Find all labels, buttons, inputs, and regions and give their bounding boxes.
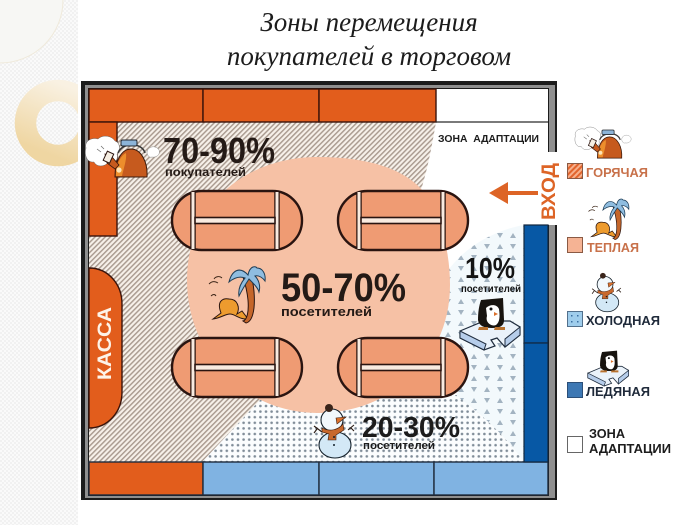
hot zone statistic: покупателей — [165, 167, 246, 179]
cold zone dots — [202, 395, 524, 462]
display table bottom left — [172, 338, 302, 397]
legend: adaptation zone — [568, 426, 671, 456]
outer walls — [81, 81, 557, 500]
legend — [568, 127, 671, 456]
decorative left strip — [0, 0, 78, 525]
icon: penguin on ice — [460, 298, 520, 350]
legend: hot zone — [568, 164, 648, 180]
legend: hot zone: ГОРЯЧАЯ — [586, 165, 648, 180]
warm zone statistic: посетителей — [281, 304, 372, 319]
cash desk: КАССА — [94, 307, 116, 380]
icy zone statistic — [461, 253, 521, 295]
warm zone — [187, 157, 450, 413]
title: Зоны перемещения — [260, 7, 478, 37]
icon: kettle — [85, 136, 159, 177]
legend: warm zone: ТЕПЛАЯ — [587, 240, 639, 255]
right icy shelves — [524, 225, 548, 462]
legend icon: kettle — [575, 127, 631, 158]
legend: warm zone — [568, 238, 639, 255]
icon: snowman — [314, 404, 354, 458]
legend icon: snowman — [592, 273, 621, 312]
left hot shelf — [89, 122, 117, 236]
warm zone statistic: 50-70% — [281, 266, 406, 310]
legend: adaptation zone: АДАПТАЦИИ — [589, 441, 671, 456]
hot zone statistic: 70-90% — [163, 130, 275, 171]
legend: cold zone: ХОЛОДНАЯ — [586, 313, 660, 328]
entrance arrow — [489, 182, 538, 204]
icy zone statistic: посетителей — [461, 284, 521, 295]
cold zone statistic: 20-30% — [362, 412, 460, 444]
legend: icy zone: ЛЕДЯНАЯ — [586, 384, 650, 399]
title — [227, 7, 511, 71]
display table bottom right — [338, 338, 468, 397]
icon: palm — [209, 267, 265, 323]
adaptation zone label: ЗОНА АДАПТАЦИИ — [438, 133, 539, 145]
icy zone statistic: 10% — [465, 253, 515, 285]
top hot shelves — [89, 89, 436, 122]
cash desk — [89, 268, 122, 428]
display table top right — [338, 191, 468, 250]
title: покупателей в торговом — [227, 41, 511, 71]
floor plan — [81, 81, 560, 500]
legend icon: palm — [588, 199, 629, 240]
bottom shelves — [89, 462, 548, 495]
legend icon: penguin — [588, 351, 629, 386]
legend: adaptation zone: ЗОНА — [589, 426, 626, 441]
cold zone statistic: посетителей — [363, 440, 435, 452]
hot zone hatching — [89, 122, 436, 462]
adaptation zone shelf outline — [436, 121, 548, 123]
display table top left — [172, 191, 302, 250]
entrance label: ВХОД — [539, 163, 560, 220]
icy zone triangles — [440, 225, 524, 462]
